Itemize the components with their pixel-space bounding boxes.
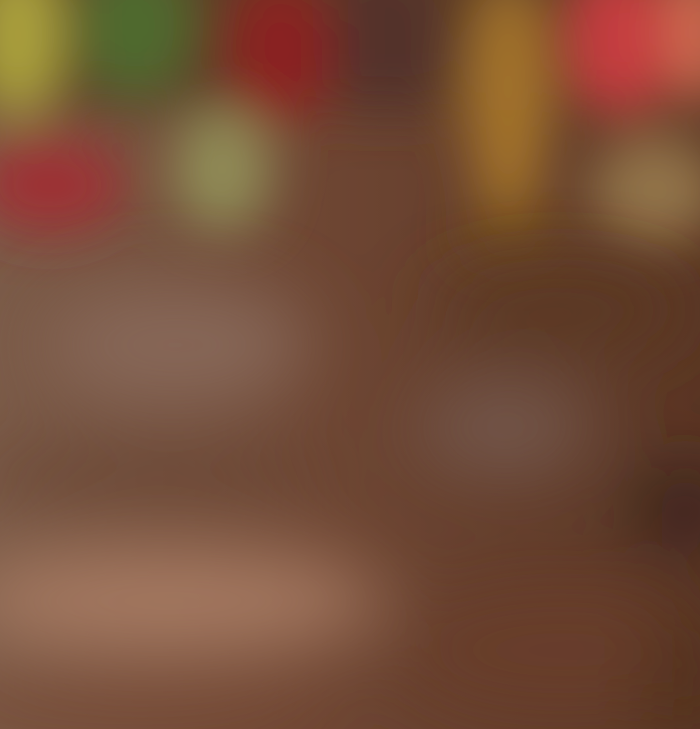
lower soft tones	[0, 270, 700, 729]
top colored band	[0, 0, 700, 260]
